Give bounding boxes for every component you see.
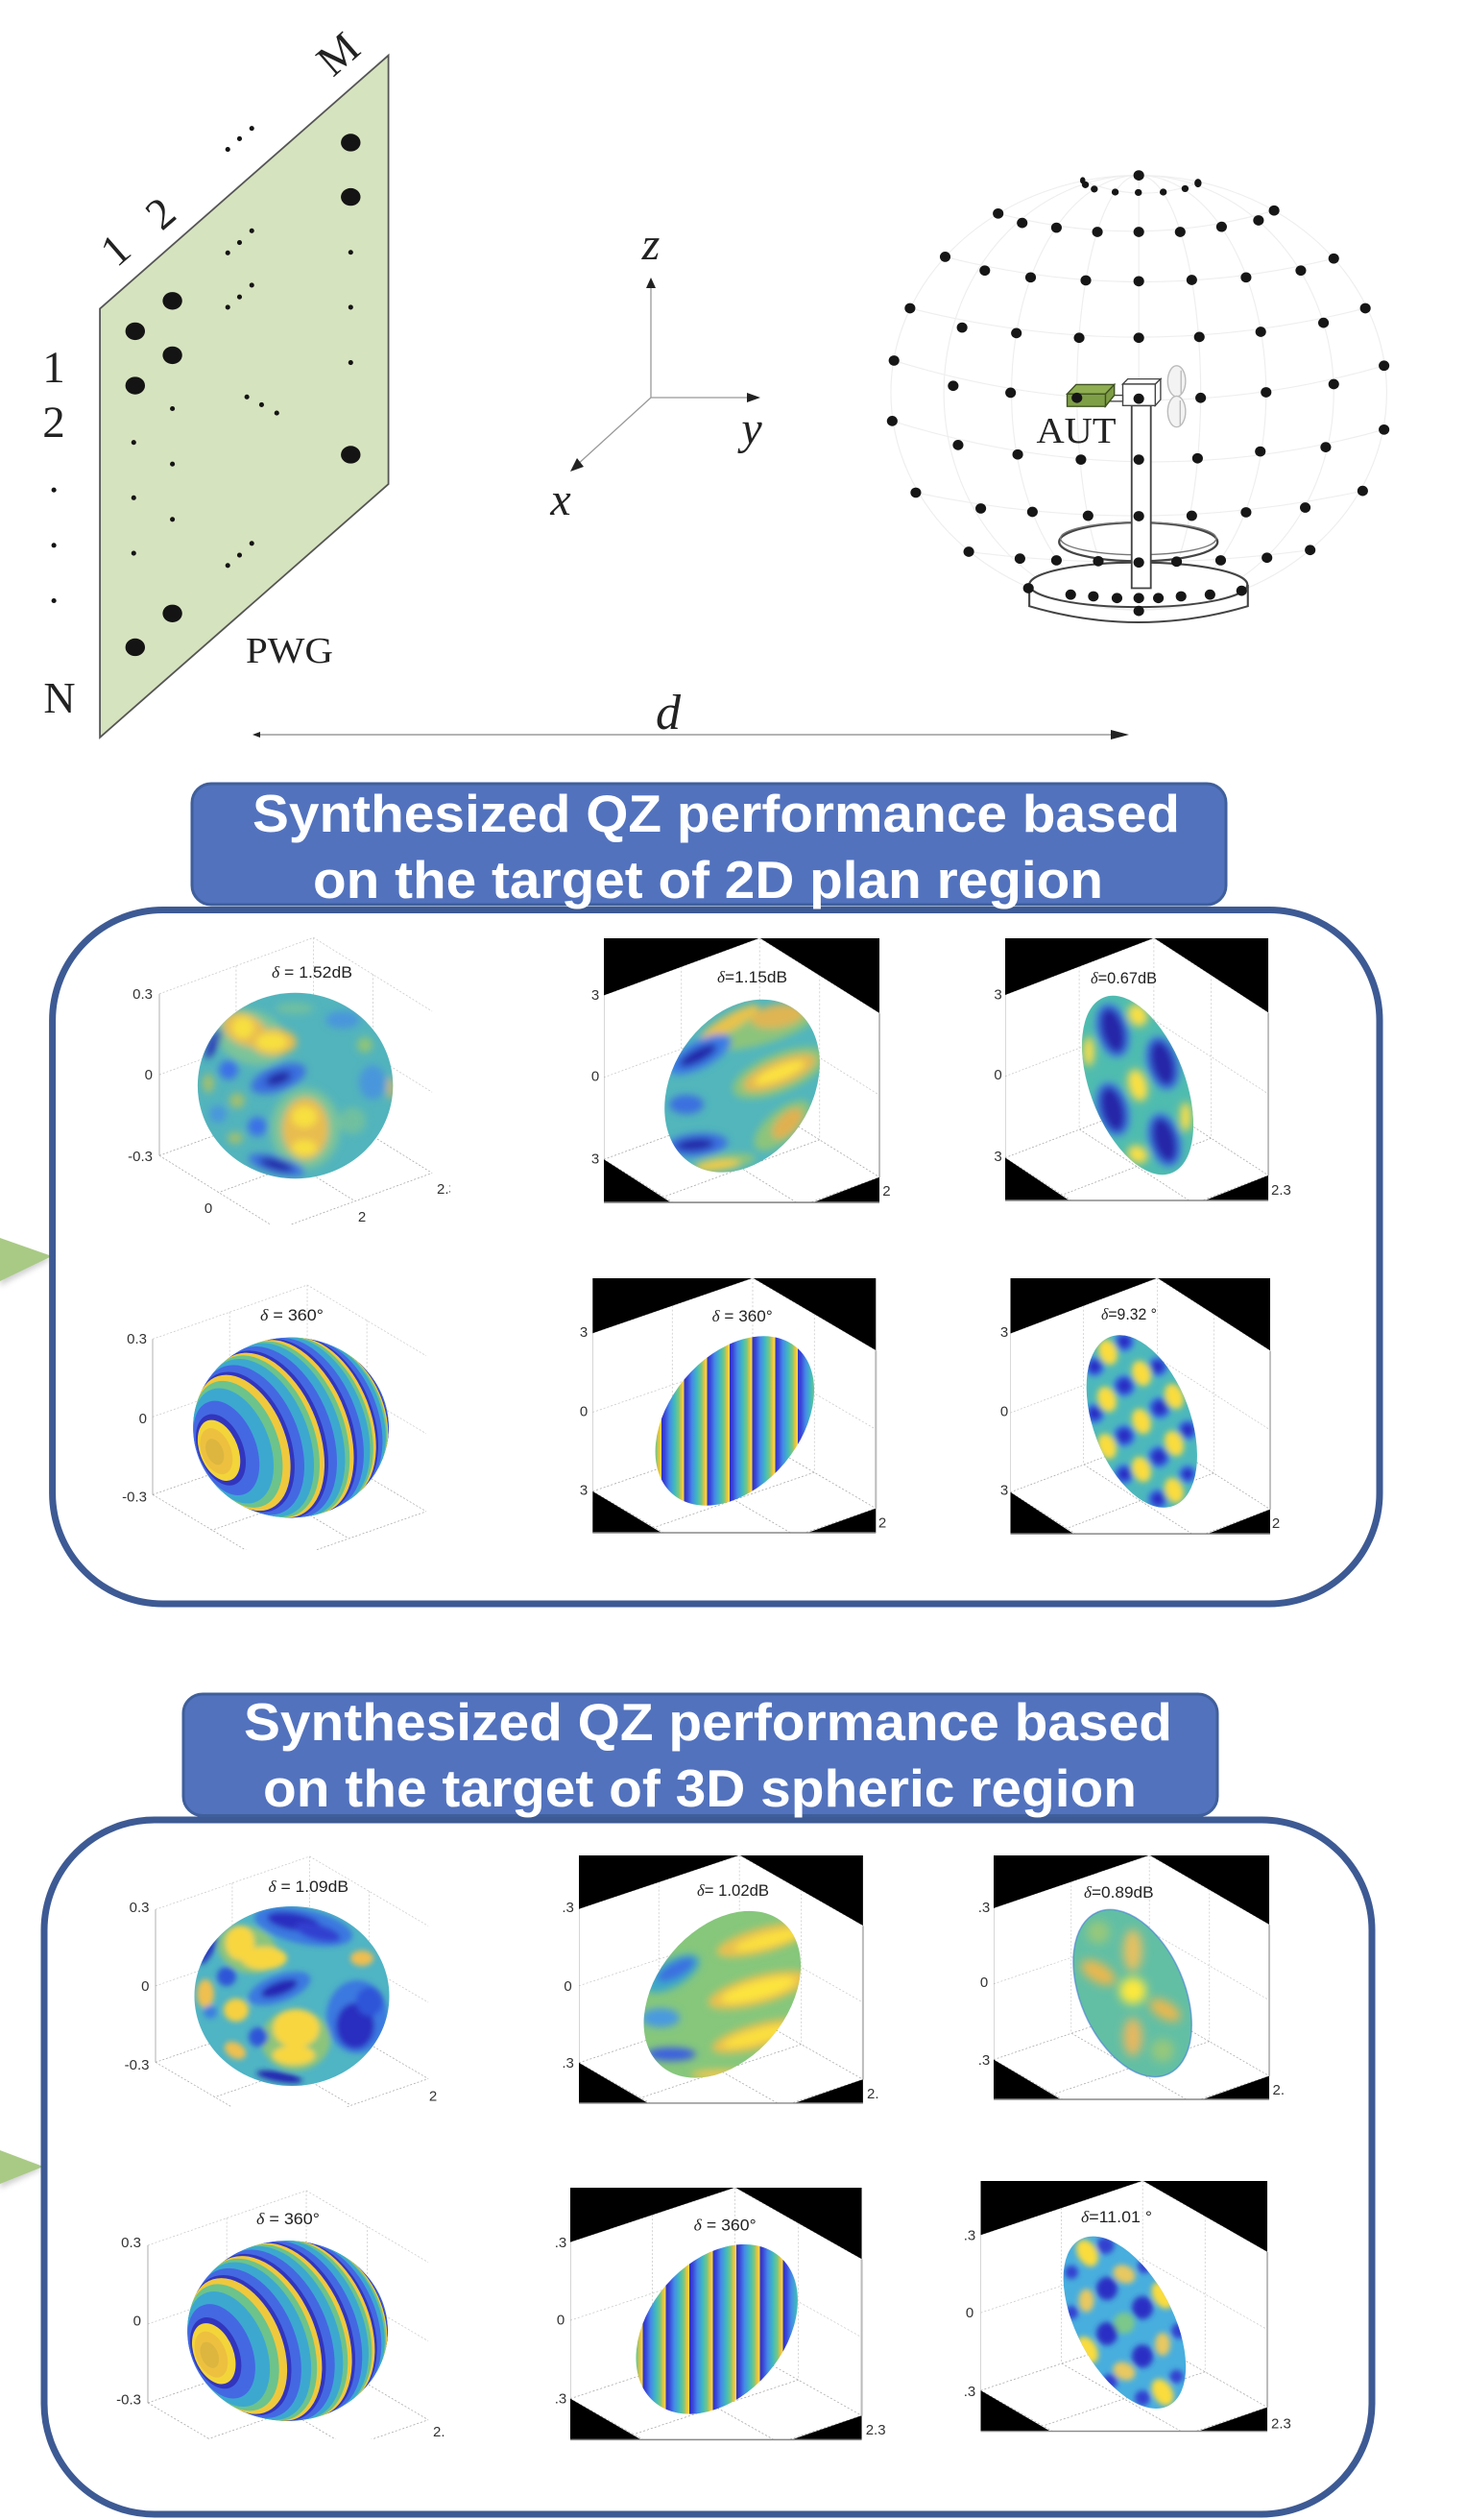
plate labels: 1 — [42, 343, 65, 393]
heading: 2D plan region — [192, 784, 1226, 909]
heading: 3D spheric region: Synthesized QZ performance based — [244, 1692, 1172, 1752]
mast — [1132, 405, 1151, 588]
ticks: 3 — [1000, 1324, 1008, 1341]
heading: 2D plan region: Synthesized QZ performance based — [252, 784, 1180, 843]
ticks: 2 — [429, 2088, 437, 2105]
title: δ=9.32 ° — [1101, 1305, 1157, 1323]
axes — [579, 1855, 863, 2133]
ticks: 2.3 — [866, 2422, 886, 2438]
coordinate axes: z — [641, 219, 661, 270]
ticks: 3 — [591, 1151, 599, 1168]
ticks: 0 — [564, 1978, 572, 1995]
plot: phase plane cut 360 degrees — [580, 1278, 885, 1534]
ticks: 0 — [994, 1067, 1002, 1083]
ticks: 2 — [878, 1515, 886, 1532]
ticks: 0 — [980, 1975, 988, 1991]
plot: amplitude sphere 1.52dB — [128, 937, 464, 1229]
title: δ= 1.02dB — [697, 1881, 769, 1900]
ticks — [125, 1900, 437, 2105]
coordinate axes: y — [736, 403, 762, 454]
heading: 2D plan region: on the target of 2D plan region — [313, 850, 1103, 909]
plot: phase sphere 360 degrees — [122, 1285, 426, 1565]
sphere grid and AUT mount — [887, 170, 1389, 622]
ticks: 0.3 — [132, 986, 153, 1003]
plate labels: 2 — [136, 187, 184, 239]
panel: planar wave generator array — [42, 22, 389, 738]
title: δ = 1.52dB — [272, 963, 352, 981]
ticks: 0.3 — [127, 1331, 147, 1347]
ticks: 2. — [433, 2424, 445, 2440]
ticks: -0.3 — [116, 2392, 141, 2409]
AUT label: AUT — [1037, 411, 1116, 451]
ticks: 3 — [580, 1483, 588, 1498]
ticks: 0 — [139, 1411, 147, 1427]
arrow into second panel — [0, 2150, 43, 2189]
arrow into first panel — [0, 1238, 52, 1286]
panel: 3D spheric region results — [44, 1820, 1372, 2514]
plot: phase sphere 360 degrees, spheric target — [117, 2190, 444, 2439]
plot: phase plane cut 9.32 degrees — [1000, 1278, 1279, 1535]
rotation ring — [1059, 522, 1217, 561]
sphere surface — [194, 1906, 390, 2086]
coordinate axes: x — [549, 474, 571, 525]
axes — [1010, 1278, 1270, 1564]
disc surface — [1081, 995, 1194, 1175]
plot: amplitude plane cut 1.02dB — [563, 1855, 877, 2104]
disc surface — [636, 2244, 798, 2414]
ticks: 0 — [966, 2305, 973, 2321]
plot: amplitude plane cut 0.67dB — [995, 938, 1290, 1201]
ticks — [128, 986, 464, 1225]
ticks: 0 — [557, 2313, 565, 2329]
ticks: .3 — [964, 2228, 975, 2243]
positioner head — [1122, 379, 1161, 384]
distance arrow d — [252, 686, 1129, 740]
title: δ = 360° — [256, 2210, 320, 2228]
sphere surface — [160, 2217, 415, 2446]
title: δ=0.67dB — [1091, 969, 1157, 987]
sphere surface — [166, 1313, 416, 1542]
disc surface — [1087, 1335, 1197, 1508]
ticks: .3 — [978, 1900, 990, 1916]
AUT box — [1068, 384, 1115, 394]
rotation arrows — [1167, 366, 1186, 427]
ticks: .3 — [555, 2235, 566, 2251]
disc surface — [643, 1911, 801, 2078]
sampling probes — [887, 170, 1389, 616]
ticks: 0 — [133, 2314, 141, 2330]
ticks: 2.3 — [1271, 1182, 1291, 1199]
plate labels: PWG — [246, 631, 333, 671]
plate labels: 2 — [42, 398, 65, 448]
ticks: 0.3 — [121, 2235, 141, 2251]
plate labels: N — [43, 673, 76, 722]
ticks: 0.3 — [130, 1900, 150, 1916]
ticks — [591, 987, 891, 1199]
coordinate axes — [549, 219, 762, 525]
title: δ = 360° — [712, 1307, 773, 1325]
title: δ=11.01 ° — [1081, 2208, 1152, 2226]
panel: 2D plan region results — [53, 910, 1380, 1604]
plot: amplitude plane cut 1.15dB — [591, 938, 890, 1203]
sphere surface — [192, 989, 398, 1181]
plot: amplitude sphere 1.09dB — [125, 1856, 437, 2132]
plot: phase plane cut 360 degrees, spheric target — [556, 2188, 885, 2441]
ticks — [580, 1324, 886, 1532]
ticks: 2 — [882, 1183, 891, 1199]
axes — [156, 1856, 428, 2132]
ticks: 3 — [591, 987, 599, 1004]
ticks — [122, 1331, 147, 1506]
ticks: 3 — [1000, 1483, 1008, 1498]
plot: phase plane cut 11.01 degrees — [965, 2181, 1290, 2432]
axes — [570, 2188, 862, 2470]
disc surface — [1064, 2236, 1187, 2409]
axes — [148, 2190, 428, 2439]
ticks: 2.3 — [437, 1181, 457, 1198]
ticks: -0.3 — [122, 1489, 147, 1506]
ticks — [1000, 1324, 1280, 1532]
disc surface — [1073, 1909, 1192, 2077]
plot: amplitude plane cut 0.89dB — [979, 1855, 1284, 2100]
ticks: 2. — [1273, 2082, 1285, 2098]
ticks: 3 — [994, 987, 1002, 1003]
turntable base — [1029, 585, 1248, 622]
axes — [994, 1855, 1269, 2128]
title: δ=1.15dB — [717, 968, 787, 986]
axes — [159, 937, 432, 1229]
plate labels: 1 — [91, 224, 139, 276]
ticks: 2 — [358, 1209, 366, 1225]
distance arrow d: d — [656, 686, 682, 740]
ticks: 0 — [141, 1978, 150, 1995]
ticks: -0.3 — [125, 2057, 150, 2073]
disc surface — [655, 1336, 814, 1506]
title: δ=0.89dB — [1084, 1883, 1154, 1902]
ticks — [116, 2235, 445, 2440]
panel: spherical near-field sampling — [887, 170, 1389, 622]
heading: 3D spheric region: on the target of 3D spheric region — [263, 1758, 1137, 1818]
ticks — [994, 987, 1291, 1199]
ticks: .3 — [964, 2384, 975, 2400]
title: δ = 360° — [694, 2217, 757, 2235]
ticks — [978, 1900, 1285, 2098]
axes — [604, 938, 879, 1234]
ticks: 2 — [1272, 1515, 1280, 1532]
axes — [592, 1278, 876, 1563]
disc surface — [664, 999, 820, 1173]
axes — [153, 1285, 426, 1565]
axes — [981, 2181, 1267, 2461]
plate labels — [42, 22, 369, 722]
ticks: 3 — [994, 1149, 1002, 1165]
ticks — [555, 2235, 886, 2438]
ticks: 2. — [867, 2086, 879, 2102]
ticks: .3 — [562, 1900, 574, 1916]
ticks: 3 — [580, 1324, 588, 1341]
ticks: .3 — [562, 2055, 574, 2072]
title: δ = 360° — [260, 1306, 324, 1324]
ticks: 0 — [204, 1200, 212, 1217]
ticks — [562, 1900, 879, 2102]
ticks — [964, 2228, 1291, 2433]
ticks: .3 — [978, 2052, 990, 2069]
ticks: 0 — [580, 1404, 588, 1419]
title: δ = 1.09dB — [269, 1878, 348, 1896]
axes — [1005, 938, 1268, 1232]
ticks: 2.3 — [1271, 2416, 1291, 2433]
ticks: 0 — [145, 1067, 153, 1083]
PWG plate with array dots — [52, 56, 389, 738]
ticks: 0 — [1000, 1404, 1008, 1419]
ticks: 0 — [591, 1068, 599, 1085]
heading: 3D spheric region — [183, 1692, 1217, 1818]
plate labels: M — [307, 22, 369, 85]
ticks: -0.3 — [128, 1149, 153, 1165]
ticks: .3 — [555, 2391, 566, 2407]
